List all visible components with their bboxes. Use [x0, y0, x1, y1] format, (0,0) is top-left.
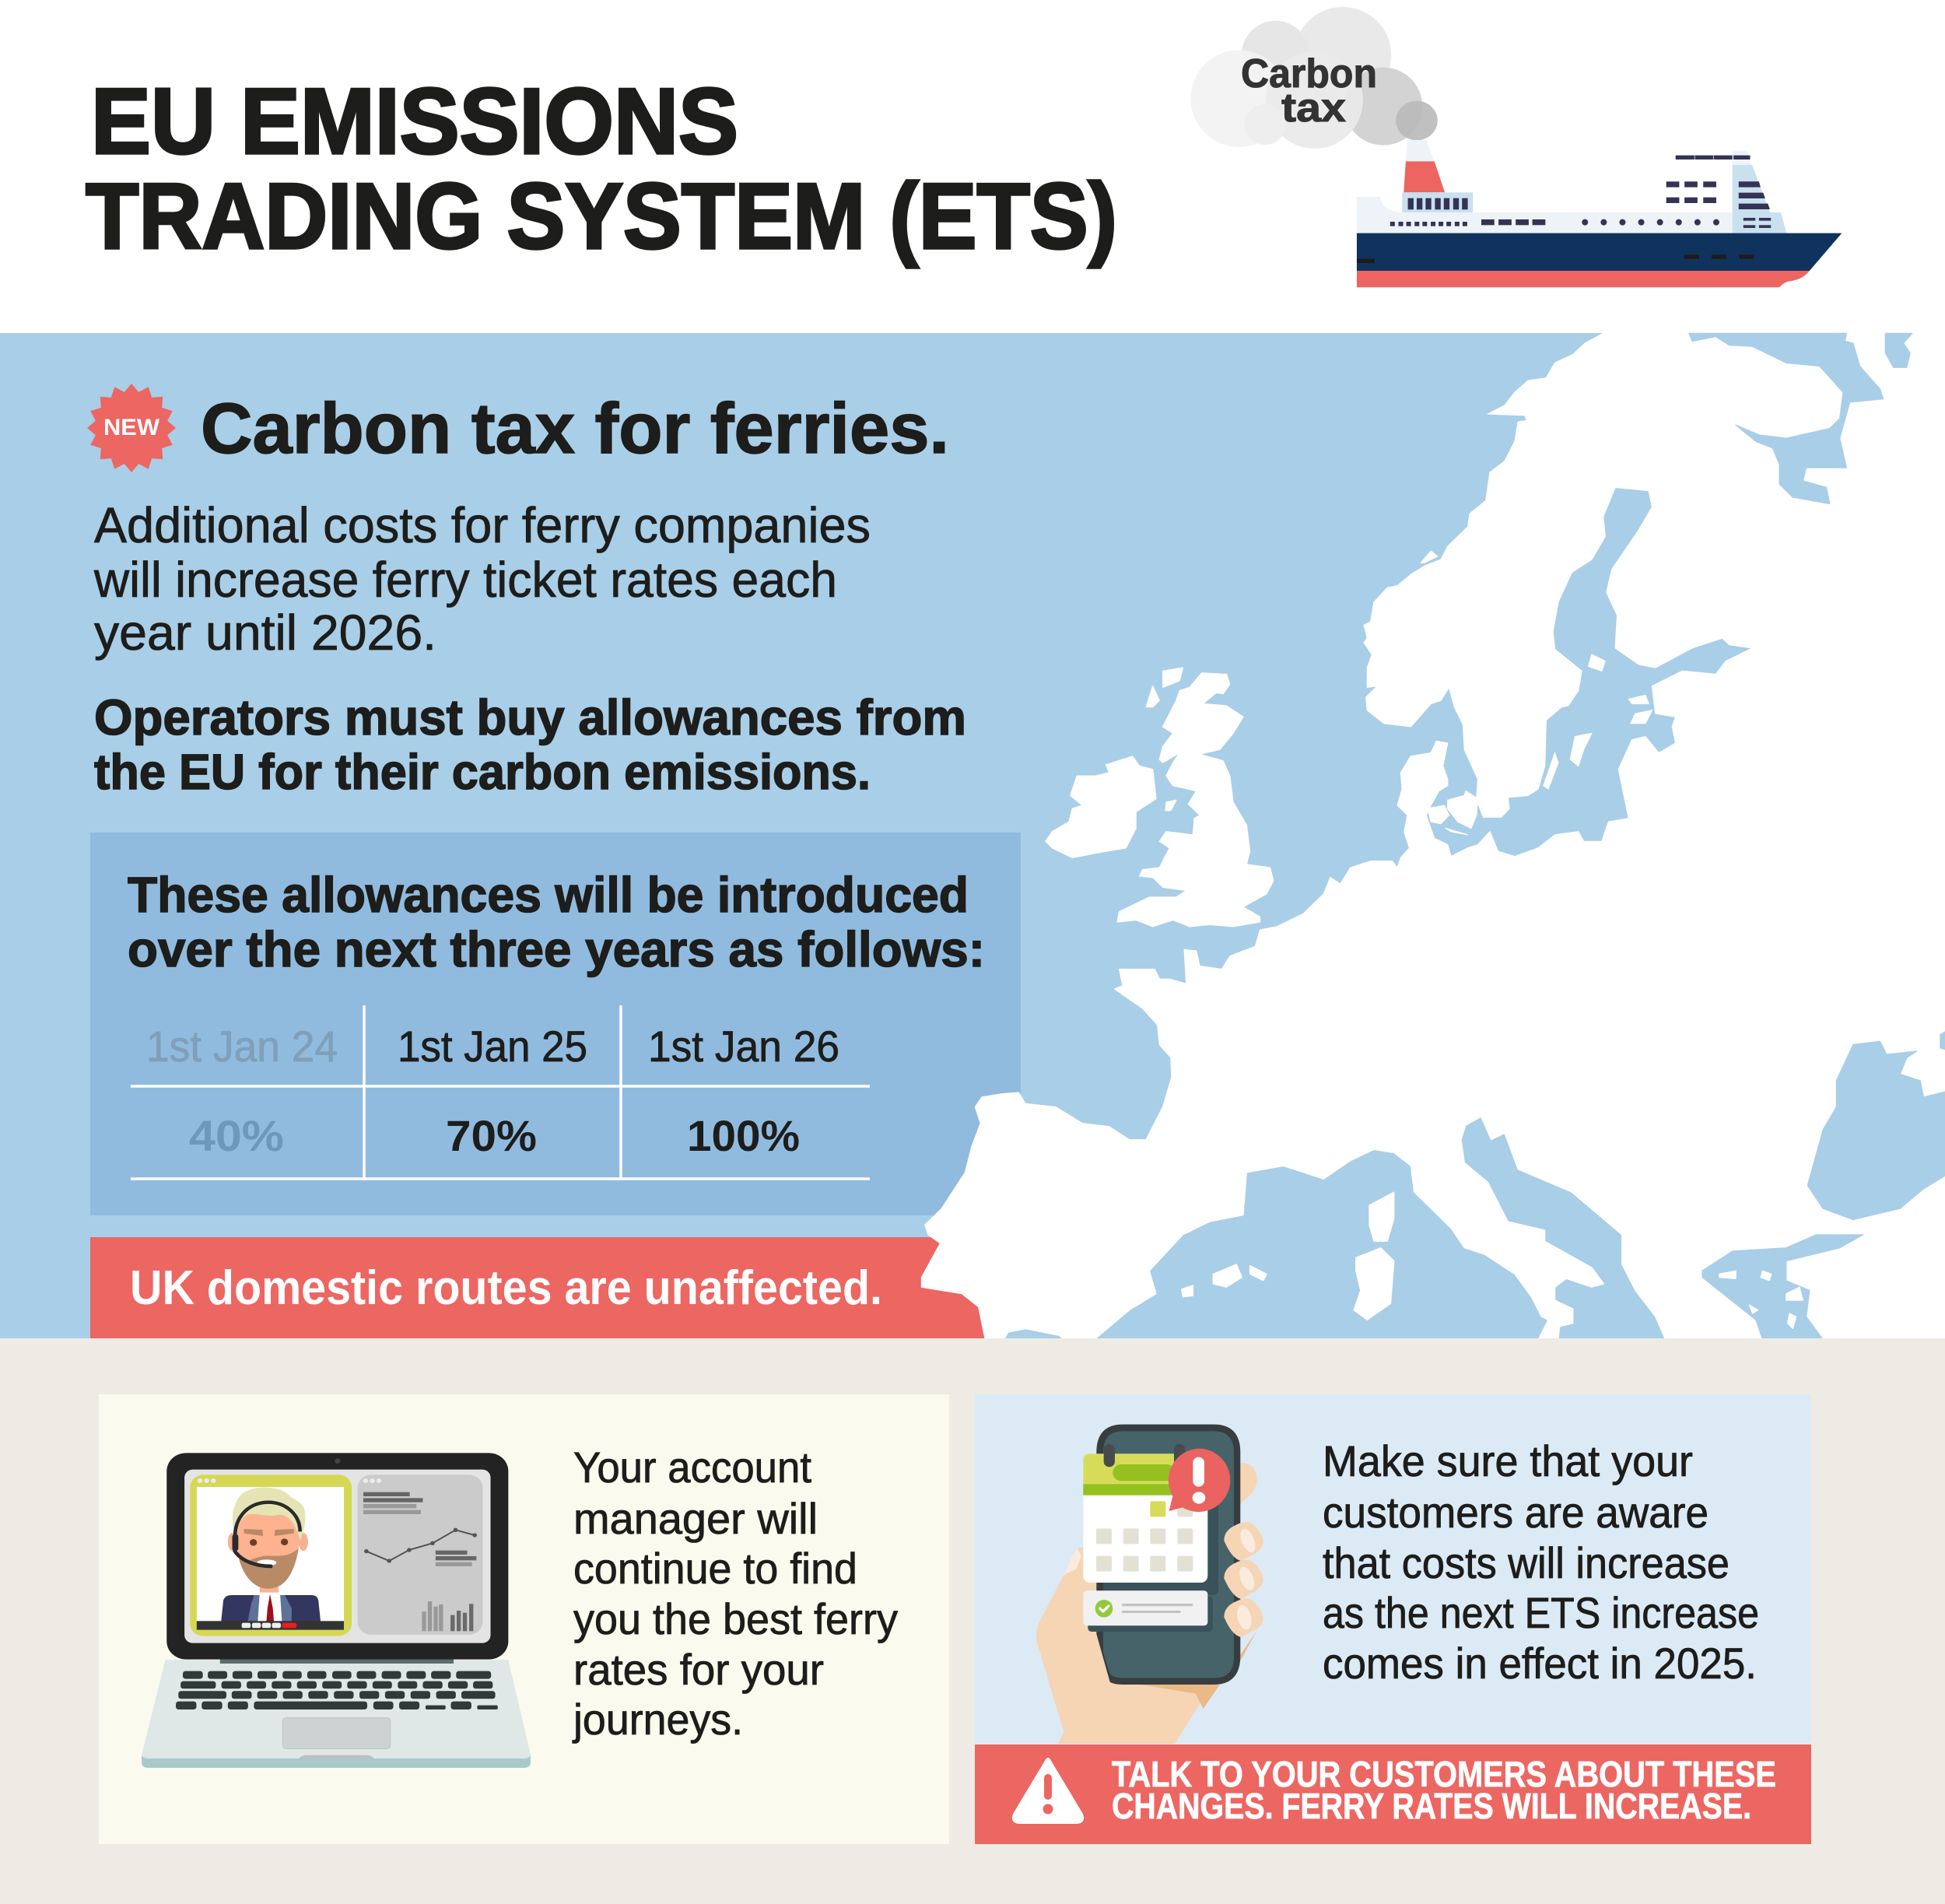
text block: allowances intro: [128, 867, 985, 977]
cloud label: Carbon: [1241, 51, 1377, 96]
panel: customers card: [975, 1394, 1811, 1844]
sea: Black Sea: [1940, 1028, 1945, 1051]
icon: laptop with video call: [142, 1453, 531, 1768]
sea: White Sea and Arctic inlets: [1005, 333, 1945, 1340]
land: Ireland: [1046, 756, 1156, 857]
text block: account manager: [572, 1443, 898, 1744]
text block: operators must buy allowances: [94, 689, 966, 800]
banner: talk to your customers: [975, 1744, 1811, 1844]
text block: account manager: Your account: [573, 1443, 811, 1492]
text block: make sure customers are aware: as the next ETS increase: [1323, 1588, 1759, 1637]
text block: account manager: manager will: [573, 1494, 818, 1543]
text block: additional costs: year until 2026.: [94, 605, 436, 661]
icon: phone with calendar alert in hand: [1036, 1425, 1263, 1744]
badge: NEW: [87, 384, 176, 472]
text block: additional costs: [93, 497, 871, 661]
text block: make sure customers are aware: comes in effect in 2025.: [1323, 1639, 1757, 1688]
text block: operators must buy allowances: Operators must buy allowances from: [94, 689, 966, 745]
cloud label: [1241, 51, 1377, 131]
text block: account manager: you the best ferry: [573, 1594, 898, 1643]
title: TRADING SYSTEM (ETS): [86, 164, 1117, 268]
text block: additional costs: Additional costs for ferry companies: [94, 497, 871, 553]
panel: allowances table background: [90, 833, 1021, 1215]
panel: sea background: [0, 333, 1945, 1338]
text block: make sure customers are aware: Make sure that your: [1323, 1436, 1693, 1485]
table: allowance schedule: 100%: [687, 1111, 800, 1160]
text block: make sure customers are aware: [1323, 1436, 1759, 1688]
text block: allowances intro: over the next three years as follows:: [128, 921, 985, 977]
heading: Carbon tax for ferries: Carbon tax for ferries.: [201, 389, 949, 468]
sea: Aegean: [1702, 1235, 1863, 1340]
banner: UK domestic background: [90, 1237, 1024, 1338]
table: allowance schedule: 1st Jan 26: [648, 1022, 839, 1071]
banner: talk to your customers: TALK TO YOUR CUSTOMERS ABOUT THESE: [1112, 1754, 1776, 1794]
title: EU EMISSIONS: [91, 69, 738, 174]
text block: operators must buy allowances: the EU for their carbon emissions.: [94, 744, 871, 800]
icon: warning triangle: [1015, 1760, 1081, 1822]
text block: additional costs: will increase ferry ticket rates each: [93, 552, 837, 608]
cloud label: tax: [1281, 86, 1346, 131]
text block: account manager: continue to find: [573, 1544, 857, 1593]
text block: make sure customers are aware: that costs will increase: [1323, 1538, 1729, 1587]
text block: make sure customers are aware: customers are aware: [1323, 1488, 1708, 1537]
text block: account manager: journeys.: [572, 1695, 743, 1744]
banner text: UK domestic routes: UK domestic routes are unaffected.: [130, 1261, 882, 1315]
table: allowance schedule: 70%: [446, 1111, 537, 1160]
text block: allowances intro: These allowances will be introduced: [128, 867, 969, 923]
islands: [1146, 551, 1652, 1320]
table: allowance schedule: [131, 1005, 870, 1179]
panel: account manager card: [99, 1394, 949, 1844]
banner: talk to your customers: CHANGES. FERRY RATES WILL INCREASE.: [1112, 1786, 1751, 1826]
table: allowance schedule: 40%: [189, 1111, 284, 1160]
panel: bottom background: [0, 1338, 1945, 1904]
badge: NEW: NEW: [103, 415, 160, 440]
icon: ferry with smoke cloud: [1190, 7, 1842, 287]
table: allowance schedule: 1st Jan 25: [398, 1022, 587, 1071]
title: [86, 69, 1117, 268]
table: allowance schedule: 1st Jan 24: [146, 1022, 338, 1071]
map of Europe: [921, 333, 1945, 1340]
text block: account manager: rates for your: [573, 1645, 824, 1694]
land: continental Europe: [921, 333, 1945, 1340]
land: Great Britain: [1117, 673, 1274, 927]
